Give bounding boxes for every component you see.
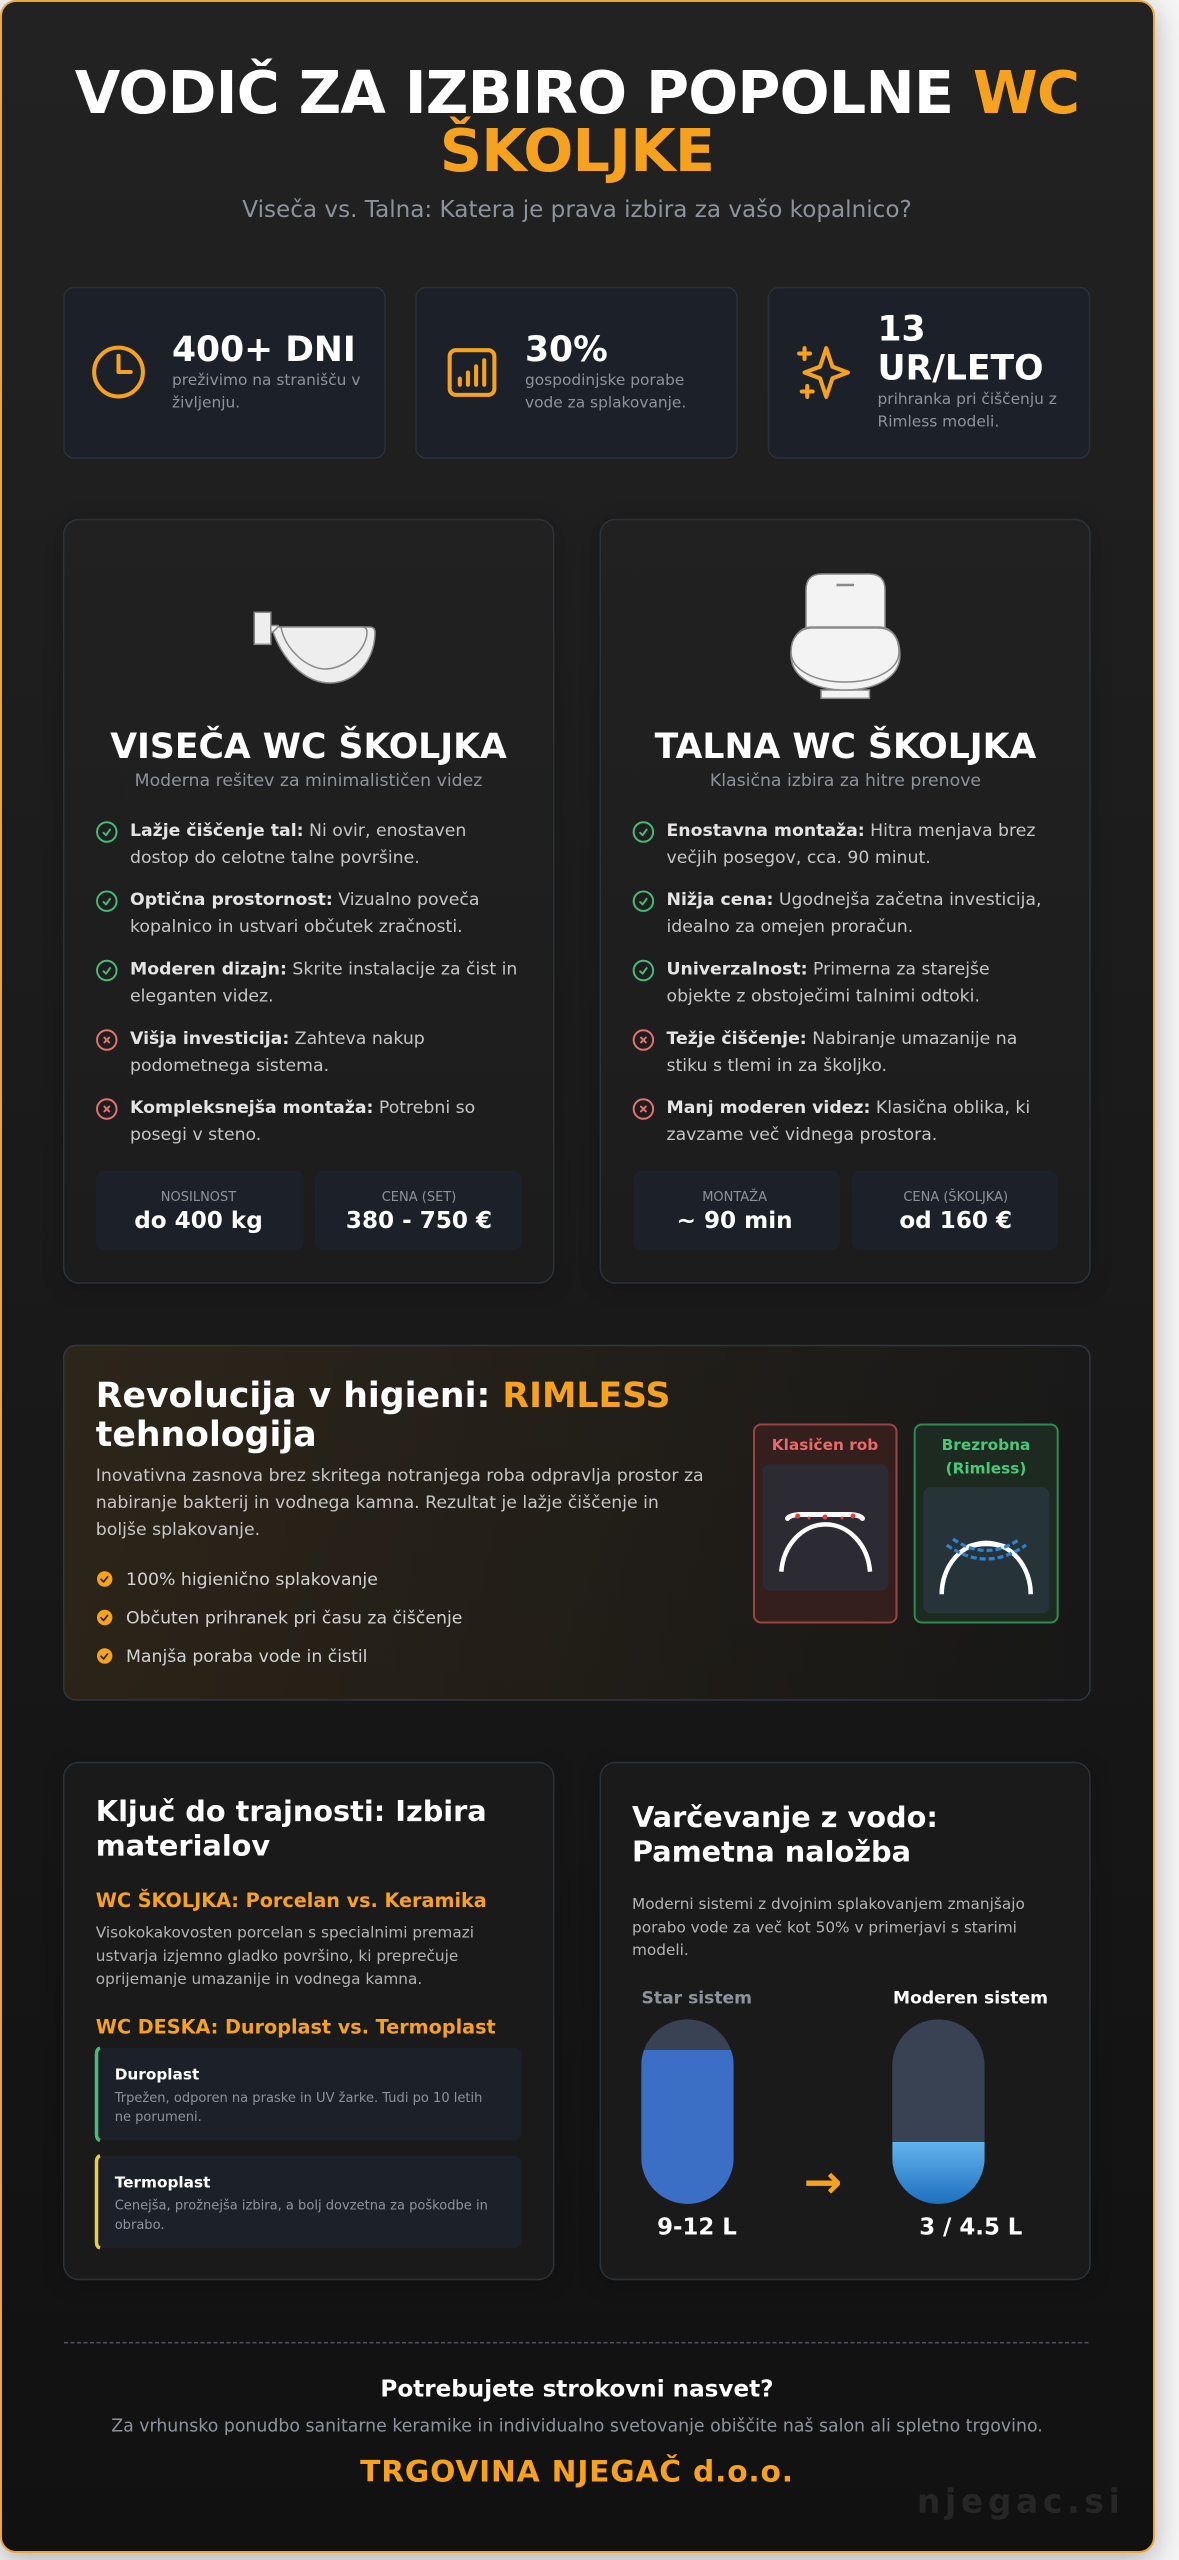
pros and cons list: Težje čiščenje: Nabiranje umazanije na [666, 1029, 1017, 1049]
benefit list: 100% higienično splakovanje [126, 1570, 378, 1590]
card: duroplast: ne porumeni. [115, 2110, 202, 2125]
subheading: Moderna rešitev za minimalističen videz [135, 771, 482, 791]
pros and cons list: eleganten videz. [130, 986, 274, 1006]
chart: modern system tank: 3 / 4.5 L [919, 2215, 1022, 2241]
icon: cross [97, 1030, 117, 1050]
pros and cons list: Lažje čiščenje tal: Ni ovir, enostaven [130, 821, 466, 841]
card: duroplast: Duroplast [115, 2066, 199, 2084]
stat card: 30%: 30% [525, 330, 608, 370]
spec: cena školjka: od 160 € [899, 1208, 1012, 1234]
stat card: 13 ur/leto: Rimless modeli. [878, 413, 999, 431]
spec: nosilnost [96, 1171, 304, 1250]
stat card: 400+ dni: preživimo na stranišču v [172, 371, 360, 389]
diagram: classic rim [754, 1424, 896, 1622]
pros and cons list [634, 821, 1042, 1145]
text: porcelain: Visokokakovosten porcelan s specialnimi premazi [96, 1924, 474, 1942]
stat card: 30% [416, 288, 737, 458]
spec: cena set: 380 - 750 € [346, 1208, 492, 1234]
pros and cons list: Višja investicija: Zahteva nakup [130, 1029, 425, 1049]
arrow: → [804, 2154, 842, 2208]
stat card: 30%: gospodinjske porabe [525, 371, 684, 389]
footer text: Za vrhunsko ponudbo sanitarne keramike in individualno svetovanje obiščite naš salon ali spletno trgovino. [111, 2417, 1043, 2437]
stat card: 13 ur/leto: 13 [878, 310, 926, 350]
description: modeli. [632, 1941, 689, 1959]
icon: cross [634, 1030, 653, 1050]
stat card: 13 ur/leto: UR/LETO [878, 348, 1043, 388]
icon: check [634, 822, 653, 842]
spec: cena set [315, 1171, 522, 1250]
icon: cross [97, 1099, 117, 1119]
icon: check [97, 961, 117, 980]
company name: TRGOVINA NJEGAČ d.o.o. [360, 2453, 794, 2490]
spec: cena školjka [852, 1171, 1058, 1250]
heading [96, 1794, 487, 1862]
panel: water saving [600, 1762, 1090, 2280]
pros and cons list: stiku s tlemi in za školjko. [666, 1056, 887, 1076]
panel: rimless technology [64, 1346, 1090, 1700]
description [632, 1895, 1025, 1959]
icon: orange check [97, 1571, 112, 1587]
watermark: njegac.si [917, 2483, 1125, 2521]
pros and cons list: Enostavna montaža: Hitra menjava brez [666, 821, 1035, 841]
title: VODIČ ZA IZBIRO POPOLNE WC [75, 58, 1079, 127]
subheading: Klasična izbira za hitre prenove [710, 771, 981, 791]
spec: cena školjka: CENA (ŠKOLJKA) [903, 1189, 1008, 1205]
icon: clock [94, 348, 143, 396]
description: boljše splakovanje. [96, 1520, 260, 1540]
description: Moderni sistemi z dvojnim splakovanjem zmanjšajo [632, 1895, 1025, 1913]
pros and cons list: idealno za omejen proračun. [666, 917, 913, 937]
description [96, 1466, 704, 1540]
heading: TALNA WC ŠKOLJKA [655, 725, 1037, 767]
pros and cons list: podometnega sistema. [130, 1056, 329, 1076]
text: porcelain [96, 1924, 474, 1988]
title: ŠKOLJKE [440, 116, 714, 185]
benefit list: Manjša poraba vode in čistil [126, 1647, 367, 1667]
heading: Revolucija v higieni: RIMLESS [96, 1376, 671, 1416]
footer [111, 2377, 1125, 2521]
heading: Varčevanje z vodo: [632, 1800, 938, 1834]
icon: wall-hung toilet [254, 612, 375, 683]
pros and cons list: Manj moderen videz: Klasična oblika, ki [666, 1098, 1030, 1118]
heading [632, 1800, 938, 1868]
chart: modern system tank [892, 1989, 1048, 2241]
icon: orange check [97, 1648, 112, 1664]
pros and cons list: Moderen dizajn: Skrite instalacije za čist in [130, 960, 517, 980]
card: termoplast [95, 2156, 521, 2248]
stat card: 30%: vode za splakovanje. [525, 394, 686, 412]
card: duroplast [95, 2048, 521, 2140]
pros and cons list: objekte z obstoječimi talnimi odtoki. [666, 986, 980, 1006]
heading: materialov [96, 1828, 270, 1862]
description: porabo vode za več kot 50% v primerjavi s starimi [632, 1918, 1017, 1936]
benefit list [97, 1570, 462, 1667]
icon: floor toilet [791, 574, 900, 698]
spec: montaža: ~ 90 min [677, 1208, 793, 1234]
diagram: rimless: Brezrobna [942, 1436, 1030, 1454]
pros and cons list: Optična prostornost: Vizualno poveča [130, 890, 479, 910]
heading: Pametna naložba [632, 1834, 911, 1868]
icon: check [634, 961, 653, 980]
title [75, 58, 1079, 185]
chart: old system tank: 9-12 L [657, 2215, 737, 2241]
text: porcelain: ustvarja izjemno gladko površino, ki preprečuje [96, 1947, 458, 1965]
heading: VISEČA WC ŠKOLJKA [110, 725, 507, 767]
icon: check [634, 891, 653, 911]
stat card: 13 ur/leto: prihranka pri čiščenju z [878, 390, 1057, 408]
card: termoplast: obrabo. [115, 2218, 165, 2233]
chart: old system tank: Star sistem [642, 1989, 752, 2009]
spec: cena set: CENA (SET) [382, 1190, 456, 1205]
stat card: 400+ dni [64, 288, 385, 458]
spec: nosilnost: NOSILNOST [161, 1190, 236, 1205]
heading: Ključ do trajnosti: Izbira [96, 1794, 487, 1828]
diagram: rimless [915, 1424, 1058, 1622]
heading [96, 1376, 671, 1455]
text: porcelain: oprijemanje umazanije in vodnega kamna. [96, 1970, 422, 1988]
stat card: 400+ dni: življenju. [172, 394, 240, 412]
subheading: bowl: WC ŠKOLJKA: Porcelan vs. Keramika [96, 1888, 487, 1912]
benefit list: Občuten prihranek pri času za čiščenje [126, 1609, 462, 1629]
diagram: rimless: (Rimless) [946, 1459, 1026, 1477]
panel: talna wc školjka [600, 520, 1090, 1283]
spec: montaža [633, 1171, 840, 1250]
pros and cons list: Nižja cena: Ugodnejša začetna investicija, [666, 890, 1042, 910]
icon: bar chart [450, 350, 494, 395]
chart: modern system tank: Moderen sistem [893, 1989, 1048, 2009]
icon: sparkles [799, 348, 848, 397]
spec: nosilnost: do 400 kg [134, 1208, 263, 1234]
spec: montaža: MONTAŽA [702, 1189, 767, 1205]
icon: check [97, 822, 117, 842]
subheading: seat: WC DESKA: Duroplast vs. Termoplast [96, 2015, 496, 2038]
icon: check [97, 891, 117, 911]
icon: orange check [97, 1610, 112, 1625]
card: termoplast: Cenejša, prožnejša izbira, a bolj dovzetna za poškodbe in [115, 2198, 488, 2214]
heading: tehnologija [96, 1415, 317, 1455]
pros and cons list: zavzame več vidnega prostora. [666, 1125, 937, 1145]
card: termoplast: Termoplast [115, 2174, 210, 2192]
subtitle: Viseča vs. Talna: Katera je prava izbira za vašo kopalnico? [242, 197, 912, 223]
description: nabiranje bakterij in vodnega kamna. Rezultat je lažje čiščenje in [96, 1493, 659, 1513]
diagram: classic rim: Klasičen rob [772, 1436, 878, 1454]
icon: cross [634, 1099, 653, 1119]
stat card: 400+ dni: 400+ DNI [172, 330, 356, 370]
pros and cons list [97, 821, 517, 1145]
chart: old system tank [641, 1989, 752, 2241]
stat card: 13 ur/leto [768, 288, 1090, 458]
description: Inovativna zasnova brez skritega notranjega roba odpravlja prostor za [96, 1466, 704, 1486]
panel: viseča wc školjka [64, 520, 554, 1283]
card: duroplast: Trpežen, odporen na praske in UV žarke. Tudi po 10 letih [114, 2091, 482, 2106]
panel: materials [64, 1762, 554, 2280]
pros and cons list: kopalnico in ustvari občutek zračnosti. [130, 917, 463, 937]
pros and cons list: Kompleksnejša montaža: Potrebni so [130, 1098, 475, 1118]
footer heading: Potrebujete strokovni nasvet? [380, 2377, 774, 2403]
pros and cons list: Univerzalnost: Primerna za starejše [666, 960, 990, 980]
pros and cons list: večjih posegov, cca. 90 minut. [666, 848, 931, 868]
pros and cons list: dostop do celotne talne površine. [130, 848, 420, 868]
pros and cons list: posegi v steno. [130, 1125, 261, 1145]
